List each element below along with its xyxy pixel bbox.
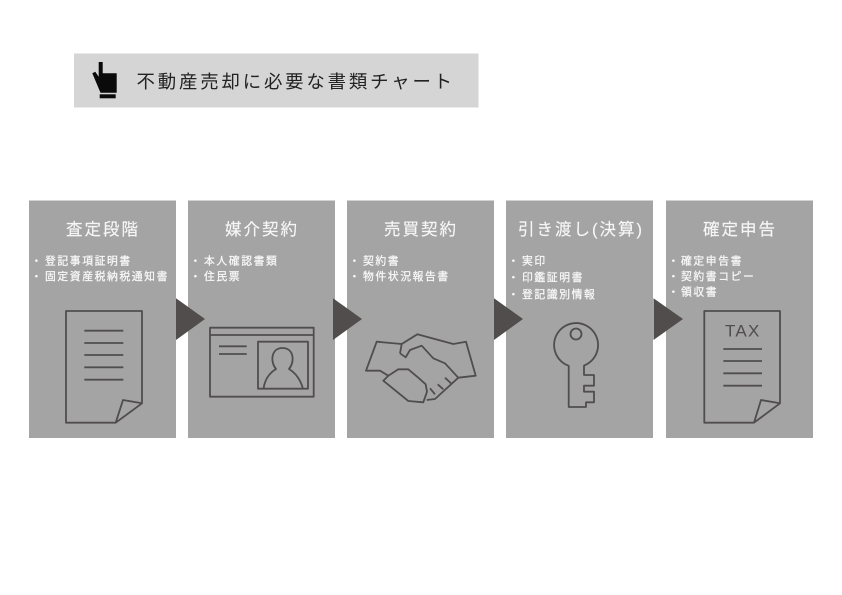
heading: 査定段階 [66,220,140,239]
document list [31,254,169,283]
icon: key [554,323,598,407]
document list: 登記識別情報 [522,287,596,301]
arrow 3 [494,298,523,340]
document list: 固定資産税納税通知書 [45,269,169,283]
panel: 売買契約 [347,200,494,438]
heading: 確定申告 [703,220,777,239]
document list: 印鑑証明書 [522,270,584,284]
document list: 契約書 [363,254,400,268]
title banner [74,54,478,108]
document list [190,254,278,283]
document list: ・ [190,271,202,283]
document list: 契約書コピー [681,269,755,283]
heading: 媒介契約 [225,220,299,239]
panel: 媒介契約 [188,200,335,438]
document list: 実印 [522,254,547,268]
document list: 登記事項証明書 [45,254,132,268]
document list: 物件状況報告書 [363,269,450,283]
document list: ・ [508,256,520,268]
document list: ・ [668,271,680,283]
document list: ・ [668,256,680,268]
document list: ・ [349,271,361,283]
panel: 査定段階 [29,200,176,438]
document list: 領収書 [681,284,718,298]
icon: tax document: TAX [725,322,761,340]
heading: 売買契約 [384,220,458,239]
document list: 確定申告書 [681,254,743,268]
document list: ・ [31,256,43,268]
icon: tax document [704,311,780,423]
arrow 4 [654,298,683,340]
document list [349,254,450,283]
icon: ID card [210,328,314,397]
arrow 1 [176,298,205,340]
icon: document [66,311,142,423]
panel: 確定申告 [666,200,813,438]
title text: 不動産売却に必要な書類チャート [136,71,455,92]
document list: ・ [190,256,202,268]
icon: pointing hand [92,62,117,98]
document list: ・ [349,256,361,268]
heading: 引き渡し(決算) [518,220,644,239]
arrow 2 [333,298,362,340]
document list: ・ [668,286,680,298]
document list: ・ [508,289,520,301]
document list: 本人確認書類 [204,254,278,268]
icon: handshake [366,334,476,402]
document list: ・ [31,271,43,283]
document list [668,254,755,298]
document list: 住民票 [204,269,241,283]
panel: 引き渡し(決算) [506,200,653,438]
document list [508,254,596,301]
document list: ・ [508,272,520,284]
